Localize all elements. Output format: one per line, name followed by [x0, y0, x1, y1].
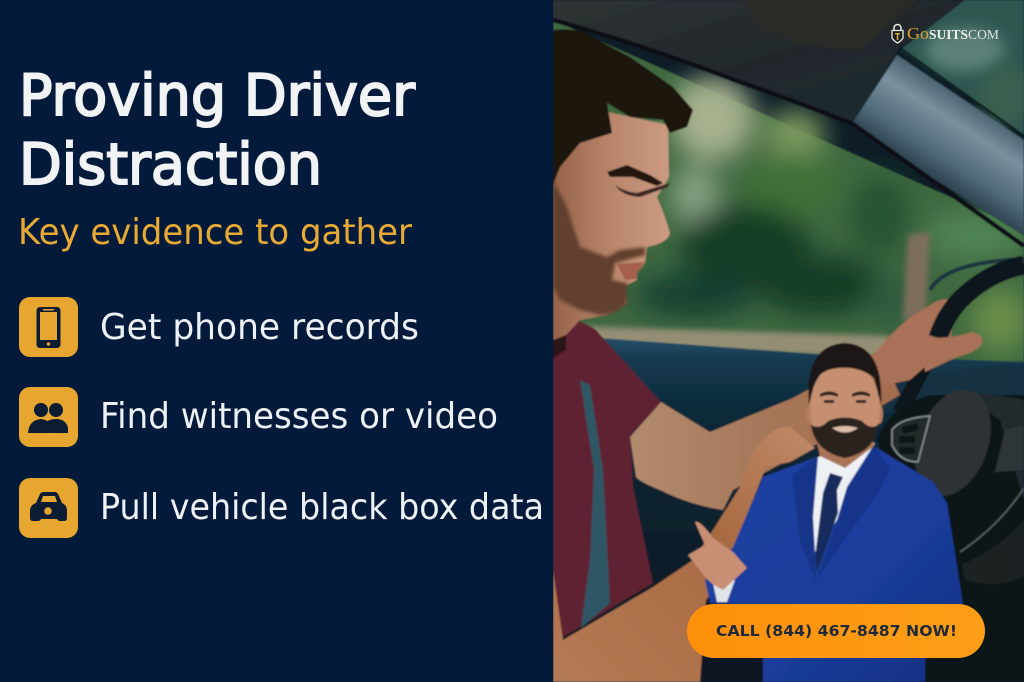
item: phone records [19, 297, 419, 357]
smile [832, 426, 858, 432]
shirt collar [813, 443, 875, 552]
column [877, 395, 1024, 682]
blurred roadside [570, 326, 890, 358]
item: phone records: Get phone records [100, 307, 419, 348]
item: witnesses or video [19, 387, 498, 447]
door panel and dashboard [600, 338, 1024, 682]
stem [900, 345, 936, 412]
fist behind rim [870, 299, 955, 385]
neck [815, 430, 874, 468]
lapel [816, 447, 890, 580]
head [810, 361, 880, 455]
eye [615, 183, 670, 197]
attorney [688, 343, 963, 682]
car window with blurred greenery [553, 20, 1024, 370]
beard [553, 180, 645, 315]
icon: people [19, 387, 78, 447]
ears [806, 404, 814, 424]
hub pad [901, 379, 1005, 507]
logo: GoSuits.com: COM [968, 27, 999, 42]
car roof and headliner [553, 0, 965, 122]
title line 2: Distraction [19, 132, 322, 198]
driver lower arm and hand [553, 427, 815, 682]
attorney beard [811, 418, 878, 458]
steering wheel [877, 259, 1024, 682]
logo: GoSuits.com: Go [907, 24, 929, 43]
hair [553, 29, 693, 185]
driver arm reaching to wheel [630, 265, 1024, 510]
eyebrows and eyes [820, 392, 870, 403]
sun visor [745, 0, 917, 50]
necktie [815, 473, 843, 572]
right wheel button [995, 425, 1024, 472]
dash top strip [880, 362, 1024, 412]
logo: GoSuits.com: SUITS [929, 27, 968, 42]
call to action button: CALL (844) 467-8487 NOW! [716, 622, 957, 640]
fingers [924, 332, 982, 372]
lower rim [960, 488, 1024, 552]
wheel buttons [892, 416, 930, 462]
subtitle: Key evidence to gather [18, 212, 412, 253]
wheel rim over fist [938, 265, 1024, 338]
blurred tree trunk [903, 232, 930, 320]
icon: car [19, 478, 78, 538]
suit jacket [705, 447, 963, 682]
windshield glass [900, 0, 1024, 137]
lips [617, 262, 645, 280]
logo: GoSuits.com [892, 24, 999, 43]
windshield pillar [853, 55, 1024, 236]
photo: distracted driver in car [553, 0, 1024, 682]
left navy panel [0, 0, 553, 682]
item: black box data: Pull vehicle black box data [100, 487, 544, 528]
sleeve cuff [713, 580, 735, 602]
item: witnesses or video: Find witnesses or video [100, 396, 498, 437]
attorney hair [808, 343, 881, 405]
eyebrow [607, 165, 663, 186]
icon: padlock [892, 24, 903, 43]
driver face [553, 29, 693, 340]
pointing hand [688, 522, 747, 590]
item: black box data [19, 478, 544, 538]
title: Proving Driver [19, 63, 416, 129]
driver shirt [553, 310, 661, 637]
left lapel [792, 457, 817, 582]
window frame edge [553, 20, 1024, 246]
icon: phone [19, 297, 78, 357]
call to action button [687, 604, 985, 658]
